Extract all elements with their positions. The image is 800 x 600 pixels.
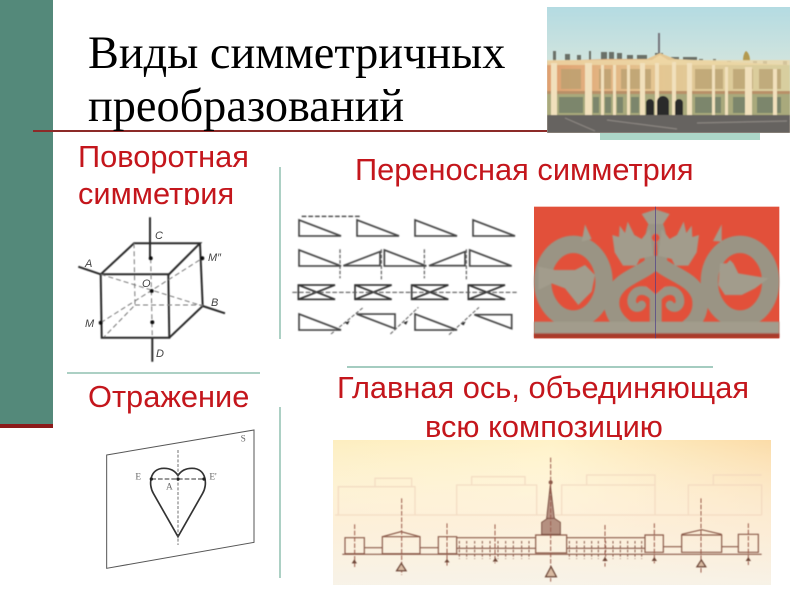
axis markers xyxy=(352,557,751,563)
heading: translational symmetry: Переносная симметрия xyxy=(355,152,694,187)
row a: translation xyxy=(299,216,515,236)
diagram: heart reflected in plane S: S xyxy=(241,435,246,445)
heading: main axis: Главная ось, объединяющая xyxy=(337,370,749,405)
title: Виды симметричных xyxy=(88,28,505,79)
mask that clips the heading bottom xyxy=(70,205,270,365)
row d: point rotation xyxy=(299,307,512,335)
diagram: rotation cube xyxy=(78,217,225,362)
faint reflected drawing xyxy=(335,475,762,515)
diagram: rotation cube: B xyxy=(211,297,218,309)
carved dragons xyxy=(543,220,771,327)
diagram: rotation cube: M xyxy=(85,318,95,330)
diagram: rotation cube: M″ xyxy=(208,252,222,264)
divider: upper vertical xyxy=(279,167,281,339)
photo: carved wooden ornament xyxy=(534,207,779,338)
axes xyxy=(355,458,748,582)
diagram: heart reflected in plane S: A xyxy=(166,483,173,493)
windows xyxy=(561,69,781,89)
facade xyxy=(342,530,762,554)
diagram: rotation cube: O xyxy=(142,278,151,290)
photo: Winter Palace xyxy=(547,7,790,140)
diagram: heart reflected in plane S: E' xyxy=(209,472,217,482)
divider: right horizontal xyxy=(347,366,713,368)
diagram: heart reflected in plane S xyxy=(107,430,254,568)
diagram: triangle translation rows xyxy=(292,216,517,335)
title: преобразований xyxy=(88,81,404,132)
title xyxy=(88,28,505,132)
sidebar: green band xyxy=(0,0,53,428)
heading: rotational symmetry xyxy=(78,139,249,211)
divider: lower-left horizontal xyxy=(67,372,260,374)
drawing: Admiralty facade blueprint xyxy=(333,440,771,585)
heading: main axis: всю композицию xyxy=(425,409,663,444)
row c: glide xyxy=(292,285,517,299)
columns xyxy=(551,62,777,117)
title rule xyxy=(33,130,547,132)
heading: main axis xyxy=(337,370,749,444)
heading: rotational symmetry: симметрия xyxy=(78,176,234,211)
central tower xyxy=(542,485,560,534)
heading: reflection: Отражение xyxy=(88,379,249,414)
diagram: rotation cube: C xyxy=(155,230,163,242)
row b: mirror xyxy=(299,249,512,279)
diagram: rotation cube: A xyxy=(84,258,92,270)
divider: lower vertical xyxy=(279,407,281,578)
diagram: rotation cube: D xyxy=(156,348,164,360)
colonnade ticks xyxy=(459,541,642,559)
diagram: heart reflected in plane S: E xyxy=(135,472,141,482)
heading: rotational symmetry: Поворотная xyxy=(78,139,249,174)
